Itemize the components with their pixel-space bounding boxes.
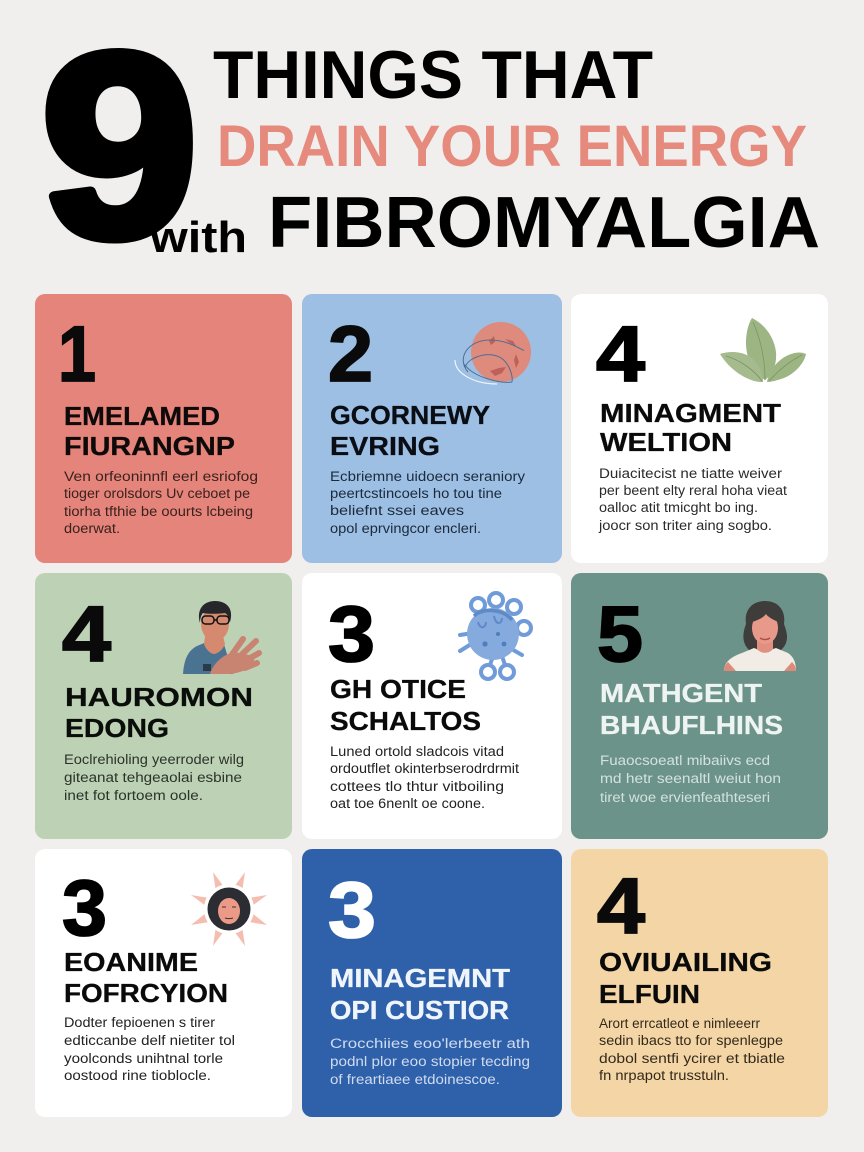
panel: card 5 white [302,573,562,839]
title line: fibromyalgia: FIBROMYALGIA [268,183,820,263]
body text [64,1015,235,1083]
body text: fn nrpapot trusstuln. [599,1068,729,1083]
heading: FIURANGNP [64,431,235,461]
number 5: 5 [597,589,643,678]
heading [330,674,481,736]
body text: sedin ibacs tto for spenlegpe [599,1033,783,1048]
number 3: 3 [328,865,376,954]
panel: card 3 white [571,294,828,563]
body text: tioger orolsdors Uv ceboet pe [64,486,250,501]
heading: EVRING [330,431,440,461]
body text: Dodter fepioenen s tirer [64,1015,216,1030]
body text: oostood rine tioblocle. [64,1068,211,1083]
heading: SCHALTOS [330,706,481,736]
heading [600,678,783,740]
heading: ELFUIN [599,979,700,1009]
body text: Arort errcatleot e nimleeerr [599,1016,760,1031]
heading: HAUROMON [65,682,253,712]
body text: yoolconds unihtnal torle [64,1051,223,1066]
icon: face in a sun [191,872,267,946]
number 4: 4 [596,309,645,398]
heading: BHAUFLHINS [600,710,783,740]
body text: joocr son triter aing sogbo. [598,518,772,533]
heading: GCORNEWY [330,400,490,430]
body text: beliefnt ssei eaves [330,503,464,518]
body text [599,1016,785,1083]
body text: dobol sentfi ycirer et tbiatle [599,1051,785,1066]
body text: md hetr seenaltl weiut hon [600,771,781,786]
heading: OPI CUSTIOR [330,995,509,1025]
body text [600,753,781,805]
body text: Fuaocsoeatl mibaiivs ecd [600,753,770,768]
title line: drain your energy: DRAIN YOUR ENERGY [217,114,807,179]
number 4: 4 [62,589,111,678]
body text: opol eprvingcor encleri. [330,521,481,536]
heading: GH OTICE [330,674,466,704]
title line: things that: THINGS THAT [213,37,653,113]
heading [599,947,772,1009]
icon: man with glasses raising hand [183,601,259,674]
body text: inet fot fortoem oole. [64,788,203,803]
body text: giteanat tehgeaolai esbine [64,770,242,785]
title word: with: with [149,213,247,262]
body text: per beent elty reral hoha vieat [599,483,787,498]
body text: peertcstincoels ho tou tine [330,486,502,501]
body text: oalloc atit tmicght bo ing. [599,500,758,515]
body text: Crocchiies eoo'lerbeetr ath [330,1036,530,1051]
body text [330,744,519,811]
number 4: 4 [597,861,645,950]
number 1: 1 [58,309,96,398]
heading: EDONG [65,713,169,743]
heading: MINAGMENT [600,398,781,428]
panel: card 7 white [35,849,292,1117]
heading [330,963,510,1025]
heading: FOFRCYION [64,978,228,1008]
body text: tiret woe ervienfeathteseri [600,790,770,805]
body text: Luned ortold sladcois vitad [330,744,504,759]
body text: tiorha tfthie be oourts lcbeing [64,504,253,519]
body text [598,466,787,533]
heading: MINAGEMNT [330,963,510,993]
body text: of freartiaee etdoinescoe. [330,1072,500,1087]
panel: card 8 dark blue [302,849,562,1117]
body text [64,469,258,536]
body text: ordoutflet okinterbserodrdrmit [330,761,519,776]
panel: card 6 teal [571,573,828,839]
body text [330,469,525,536]
heading [64,947,228,1008]
body text: Duiacitecist ne tiatte weiver [599,466,783,481]
number 3: 3 [328,589,375,678]
title [41,0,820,292]
body text: oat toe 6nenlt oe coone. [330,796,485,811]
heading [330,400,490,461]
icon: smiling woman [724,601,796,671]
body text: cottees tlo thtur vitboiling [330,779,504,794]
body text: podnl plor eoo stopier tecding [330,1054,530,1069]
heading [65,682,253,743]
icon: blue virus cell [460,593,531,679]
heading [64,401,235,461]
body text [330,1036,530,1087]
heading: OVIUAILING [599,947,772,977]
icon: green leaves [720,318,806,382]
body text [64,752,244,803]
body text: Eoclrehioling yeerroder wilg [64,752,244,767]
panel: card 4 green [35,573,292,839]
body text: Ven orfeoninnfl eerl esriofog [64,469,258,484]
body text: doerwat. [64,521,120,536]
number 2: 2 [328,309,373,398]
heading: EMELAMED [64,401,220,431]
body text: edticcanbe delf nietiter tol [64,1033,235,1048]
heading [600,398,781,457]
number 3: 3 [62,863,107,952]
heading: WELTION [600,427,732,457]
icon: planet with swirling rings [455,322,531,384]
panel: card 2 blue [302,294,562,563]
panel: card 9 sand [571,849,828,1117]
body text: Ecbriemne uidoecn seraniory [330,469,525,484]
panel: card 1 coral [35,294,292,563]
heading: EOANIME [64,947,198,977]
heading: MATHGENT [600,678,762,708]
big number nine: 9 [41,0,198,292]
